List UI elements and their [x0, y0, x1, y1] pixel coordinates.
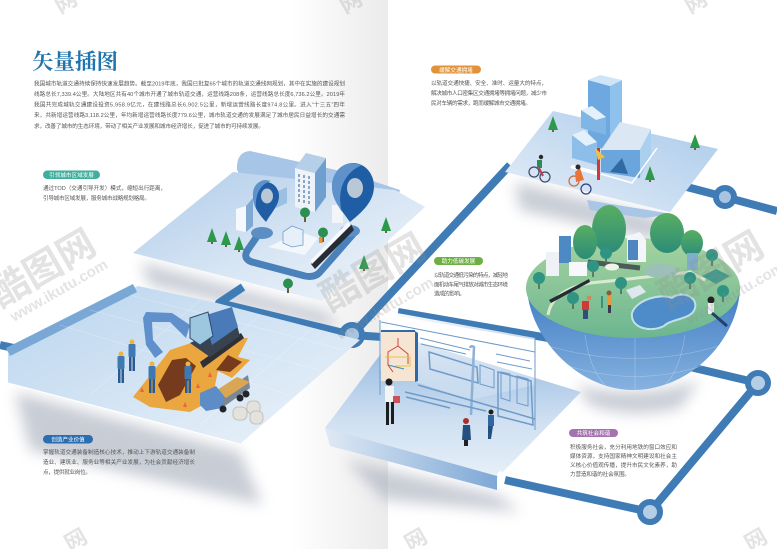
map pin left [253, 180, 279, 222]
card: low emission: 造成的影响。 [434, 290, 465, 298]
card: industry value: 点，提供就业岗位。 [43, 468, 91, 476]
gardeners planting [582, 290, 612, 319]
bowl grid [545, 335, 722, 390]
panel: station platform [325, 310, 581, 490]
title: 矢量插图 [32, 45, 118, 76]
map pin right [332, 163, 374, 222]
route stations [342, 188, 768, 522]
card: industry value: 掌握轨道交通装备制造核心技术，推动上下游轨道交通装备制 [43, 448, 195, 456]
watermarks: 酷图网 [652, 224, 771, 318]
red sign post [595, 148, 605, 180]
card: social harmony: 共筑社会和谐 [577, 429, 611, 437]
cyclist female [569, 164, 591, 194]
hemisphere bowl [527, 288, 740, 390]
watermarks: 酷图网 [314, 226, 433, 320]
card: traffic relief: 解决城市人口密集区交通拥堵等拥堵问题，减少市 [431, 89, 547, 97]
panel: top right traffic relief [505, 75, 718, 218]
buildings [546, 232, 730, 284]
road route [246, 232, 355, 276]
card: low emission: 助力低碳发展 [442, 257, 476, 265]
card: traffic relief: 民对车辆的需求，跑而缓解城市交通拥堵。 [431, 99, 531, 107]
intro text block [34, 80, 345, 130]
metro route lines [0, 165, 777, 512]
card: urban district: 通过TOD（交通引导开发）模式，缩短出行距离， [43, 184, 166, 192]
child in red cap [462, 418, 471, 446]
tower building [295, 153, 326, 212]
concrete rings [233, 401, 263, 424]
panel: industry value construction site [8, 286, 360, 444]
card: urban district: 引领城市区域发展 [49, 171, 94, 179]
card: industry value: 创造产业价值 [51, 436, 85, 444]
paths [548, 272, 705, 315]
watermarks: www.ikutu.com [333, 274, 437, 344]
card: traffic relief: 以轨道交通快捷、安全、准时、运量大的特点， [431, 79, 547, 87]
car [605, 264, 619, 270]
card: traffic relief: 缓解交通拥堵 [439, 66, 473, 74]
person reading map [385, 378, 400, 425]
panel: urban district map [133, 151, 425, 301]
orange ground [133, 338, 250, 412]
card: low emission [434, 257, 508, 298]
tall building [570, 75, 622, 176]
card: social harmony: 积极服务社会，充分利用地铁的窗口效应和 [570, 443, 677, 451]
center building [268, 226, 318, 255]
card: low emission: 以轨道交通低污染的特点，减轻地 [434, 271, 508, 279]
intro text block: 我国城市轨道交通持续保持快速发展趋势。截至2019年底，我国已批复65个城市的轨道交通线网规划，其中在实施的建设规划 [34, 80, 345, 88]
panel: green hemisphere park [526, 205, 740, 390]
wall line drawing [380, 320, 535, 430]
small trees [533, 247, 729, 309]
train [549, 279, 590, 303]
road end spots [251, 225, 360, 239]
pond [632, 295, 695, 329]
round trees [283, 208, 328, 293]
cone trees [207, 217, 391, 271]
traffic cones [140, 372, 212, 407]
card: social harmony [569, 429, 677, 478]
watermarks: www.ikutu.com [7, 256, 111, 326]
intro text block: 我国共完成城轨交通建设投资5,958.9亿元，在建线路总长6,902.5公里，新增运营线路长度974.8公里。进入“十三五”四年 [34, 100, 345, 108]
background: page fold shading [290, 0, 388, 549]
excavation pit and soil [158, 355, 242, 402]
cone trees [548, 116, 700, 182]
intro text block: 来，共新增运营线路3,118.2公里，年均新增运营线路长度779.6公里，城市轨道交通的发展满足了城市居民日益增长的交通需 [34, 111, 345, 119]
excavator [143, 307, 244, 368]
cyclist male [529, 155, 550, 182]
soft panel shadows [15, 182, 700, 512]
big trees [573, 205, 703, 259]
card: urban district [43, 170, 166, 202]
intro text block: 线路总长7,339.4公里。大陆地区共有40个城市开通了城市轨道交通，运营线路208条，运营线路总长度6,736.2公里。2019年 [34, 90, 345, 98]
card: urban district: 引导城市区域发展，服务城市战略规划格局。 [43, 194, 150, 202]
bench [626, 285, 646, 299]
card: low emission: 面机动车尾气排放对城市生态环境 [434, 280, 508, 288]
card: industry value: 造业、建筑业、服务业等相关产业发展，为社会贡献经济增长 [43, 458, 195, 466]
road [588, 262, 640, 268]
metro map board [381, 331, 418, 382]
land surface [526, 238, 740, 338]
orange marker [319, 237, 322, 243]
card: social harmony: 义核心价值观传播，提升市民文化素养，助 [570, 461, 677, 469]
card: traffic relief [431, 66, 547, 107]
card: industry value [43, 435, 195, 476]
child in blue uniform [488, 410, 494, 439]
card: social harmony: 媒体资源，支持国家精神文明建设和社会主 [570, 452, 677, 460]
metro station [601, 122, 657, 183]
card: social harmony: 力营造和谐的社会氛围。 [570, 470, 630, 478]
person sitting on edge [708, 296, 727, 326]
side buildings [236, 187, 343, 232]
dump truck [200, 375, 250, 412]
workers [118, 340, 192, 393]
metro train [311, 222, 354, 269]
intro text block: 求，改善了城市的生态环境，带动了相关产业发展和城市经济增长，促进了城市的可持续发展。 [34, 122, 264, 130]
